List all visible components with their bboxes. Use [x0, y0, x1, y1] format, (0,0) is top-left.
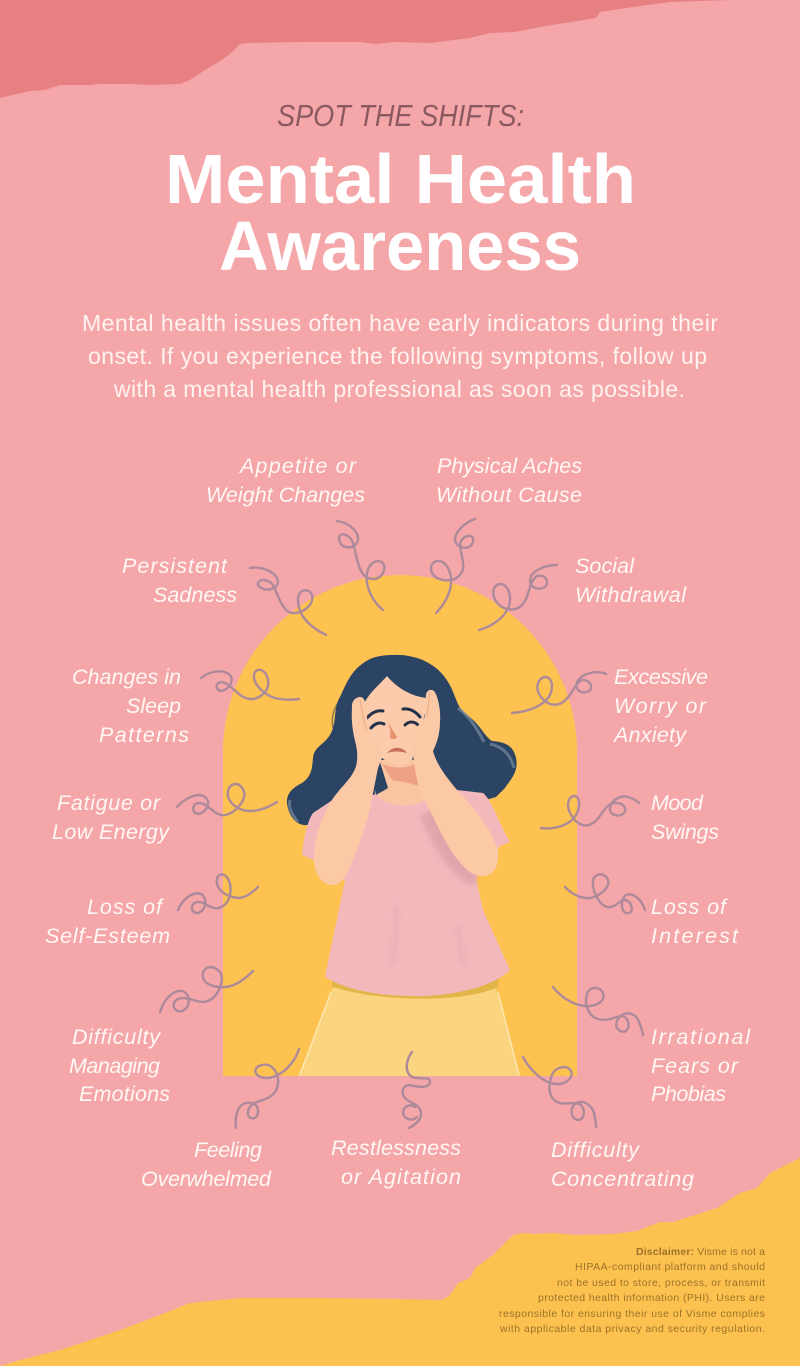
label: physical aches: Physical Aches — [437, 454, 582, 478]
label: changes in sleep: Sleep — [126, 694, 181, 718]
label: fatigue: Low Energy — [52, 820, 170, 844]
label: self-esteem — [45, 895, 170, 948]
label: social withdrawal: Social — [575, 554, 635, 578]
label: changes in sleep: Patterns — [99, 723, 189, 747]
label: changes in sleep — [72, 665, 189, 747]
shirt fold — [392, 905, 463, 965]
title: Awareness — [219, 207, 581, 285]
skirt shadow — [332, 975, 500, 999]
squiggle: persistent sadness — [250, 568, 326, 635]
label: excessive worry: Excessive — [614, 665, 708, 689]
label: restlessness: or Agitation — [341, 1165, 461, 1189]
disclaimer: HIPAA-compliant platform and should — [575, 1261, 765, 1273]
eyebrows and eyes — [367, 709, 420, 728]
label: feeling overwhelmed: Overwhelmed — [141, 1167, 272, 1191]
squiggle: self-esteem — [178, 874, 258, 913]
label: difficulty concentrating: Difficulty — [551, 1138, 640, 1162]
kicker heading: SPOT THE SHIFTS: — [277, 98, 524, 133]
label: social withdrawal: Withdrawal — [575, 583, 687, 607]
label: persistent sadness: Sadness — [153, 583, 237, 607]
label: loss of interest — [651, 895, 739, 948]
squiggle: social withdrawal — [479, 565, 557, 630]
label: self-esteem: Self-Esteem — [45, 924, 170, 948]
label: self-esteem: Loss of — [87, 895, 164, 919]
label: loss of interest: Interest — [651, 924, 739, 948]
squiggle: managing emotions — [160, 967, 253, 1012]
label: managing emotions: Emotions — [79, 1082, 170, 1106]
arm left — [314, 697, 382, 885]
hair — [287, 655, 517, 825]
label: mood swings: Mood — [651, 791, 704, 815]
disclaimer: responsible for ensuring their use of Visme complies — [499, 1308, 765, 1320]
label: irrational fears — [651, 1025, 751, 1106]
shirt shading — [420, 810, 478, 885]
yellow arch — [223, 575, 577, 1076]
label: irrational fears: Fears or — [651, 1054, 739, 1078]
symptom labels — [45, 454, 751, 1191]
shirt — [302, 790, 510, 996]
label: appetite: Weight Changes — [206, 483, 365, 507]
nose — [388, 722, 397, 739]
disclaimer: Disclaimer: Visme is not a — [636, 1246, 765, 1258]
squiggle: fatigue — [177, 784, 277, 815]
label: excessive worry — [612, 665, 708, 747]
skirt highlights — [300, 992, 519, 1075]
face — [364, 676, 428, 765]
label: social withdrawal — [575, 554, 687, 607]
hair highlight — [289, 708, 514, 822]
intro paragraph: onset. If you experience the following symptoms, follow up — [88, 343, 707, 369]
label: appetite — [206, 454, 365, 507]
title — [165, 140, 636, 285]
label: excessive worry: Worry or — [614, 694, 707, 718]
label: persistent sadness: Persistent — [122, 554, 228, 578]
disclaimer — [499, 1246, 765, 1335]
label: loss of interest: Loss of — [651, 895, 728, 919]
neck — [374, 760, 436, 815]
label: managing emotions: Managing — [69, 1054, 160, 1078]
squiggle: restlessness — [403, 1052, 430, 1128]
squiggle: difficulty concentrating — [523, 1057, 596, 1127]
label: irrational fears: Irrational — [651, 1025, 751, 1049]
label: managing emotions — [69, 1025, 170, 1106]
label: changes in sleep: Changes in — [72, 665, 181, 689]
finger lines — [360, 693, 430, 730]
label: difficulty concentrating — [551, 1138, 694, 1191]
intro paragraph: Mental health issues often have early indicators during their — [82, 310, 718, 336]
torn paper band: bottom — [0, 1158, 800, 1366]
disclaimer: not be used to store, process, or transmit — [557, 1277, 765, 1289]
label: restlessness: Restlessness — [331, 1136, 461, 1160]
intro paragraph — [82, 310, 718, 402]
disclaimer: with applicable data privacy and security regulation. — [499, 1323, 765, 1335]
label: appetite: Appetite or — [238, 454, 357, 478]
label: physical aches: Without Cause — [436, 483, 582, 507]
squiggle: appetite — [337, 521, 384, 610]
squiggle: irrational fears — [553, 987, 643, 1035]
hair strands beside neck — [372, 762, 426, 795]
squiggle: excessive worry — [512, 672, 606, 713]
label: feeling overwhelmed — [141, 1138, 272, 1191]
squiggle: changes in sleep — [201, 670, 299, 700]
torn paper band: top — [0, 0, 730, 98]
label: managing emotions: Difficulty — [72, 1025, 161, 1049]
label: fatigue: Fatigue or — [57, 791, 161, 815]
label: difficulty concentrating: Concentrating — [551, 1167, 694, 1191]
label: physical aches — [436, 454, 582, 507]
mouth — [387, 748, 407, 753]
label: feeling overwhelmed: Feeling — [194, 1138, 262, 1162]
label: excessive worry: Anxiety — [612, 723, 687, 747]
label: persistent sadness — [122, 554, 237, 607]
label: fatigue — [52, 791, 170, 844]
squiggle: loss of interest — [565, 874, 645, 913]
label: mood swings — [651, 791, 719, 844]
title: Mental Health — [165, 140, 636, 218]
label: irrational fears: Phobias — [651, 1082, 726, 1106]
squiggle: feeling overwhelmed — [236, 1049, 299, 1128]
disclaimer: protected health information (PHI). Users are — [538, 1292, 765, 1304]
label: restlessness — [331, 1136, 461, 1189]
neck shadow — [382, 762, 426, 790]
hair outline wisp — [332, 690, 352, 728]
squiggle: physical aches — [431, 519, 475, 613]
illustration: stressed woman — [287, 655, 520, 1076]
intro paragraph: with a mental health professional as soon as possible. — [113, 376, 685, 402]
skirt — [298, 987, 520, 1076]
label: mood swings: Swings — [651, 820, 719, 844]
arm right — [410, 690, 498, 876]
squiggle: mood swings — [541, 796, 639, 828]
squiggles — [160, 519, 645, 1128]
